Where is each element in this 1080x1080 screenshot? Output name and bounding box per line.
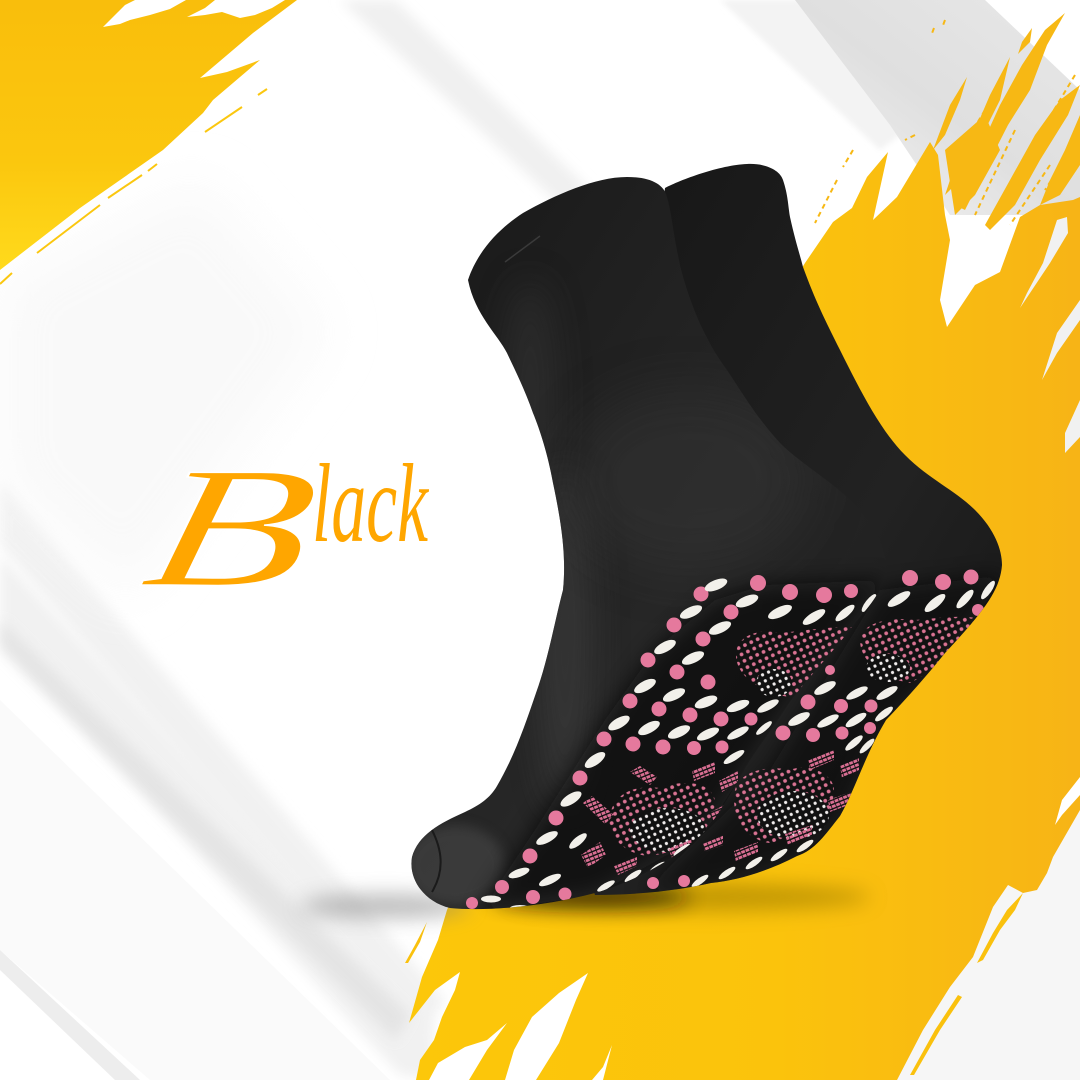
yellow brush stroke: top left: [0, 0, 297, 284]
white brush streaks inside yellow: right: [1020, 217, 1080, 453]
back sock: [560, 164, 1005, 895]
heading: Black: [130, 432, 429, 622]
yellow brush area: right and bottom: [409, 142, 1080, 1080]
ground shadow beneath the socks: [300, 883, 870, 918]
speckled streak lines: [815, 20, 1080, 225]
heading: Black: lack: [312, 442, 429, 566]
yellow slivers along the edges: [405, 690, 1023, 1075]
front sock shading, toe and sole pattern: [405, 236, 885, 912]
front sock pink dots: [466, 575, 858, 909]
back sock white dashes: [690, 579, 997, 889]
front sock sole dark area: [480, 580, 885, 912]
front sock forefoot heart: [736, 627, 858, 697]
heading: Black: B: [130, 432, 333, 622]
yellow brush streaks on grey: top right: [815, 13, 1080, 230]
front sock pink stripe blocks: [581, 762, 738, 875]
front sock white dashes: [481, 576, 879, 911]
front sock heel heart: [609, 783, 715, 856]
top left thin yellow slivers: [0, 89, 267, 284]
front sock: [405, 177, 886, 912]
back sock forefoot heart: [860, 617, 975, 683]
back sock pink stripe blocks: [703, 750, 859, 862]
back sock sole pattern: [640, 570, 1005, 895]
back sock heel heart: [734, 768, 834, 843]
back sock pink dots: [647, 570, 984, 889]
top left white brush speckle: [103, 0, 285, 27]
white brush streaks: bottom: [429, 777, 1080, 1080]
